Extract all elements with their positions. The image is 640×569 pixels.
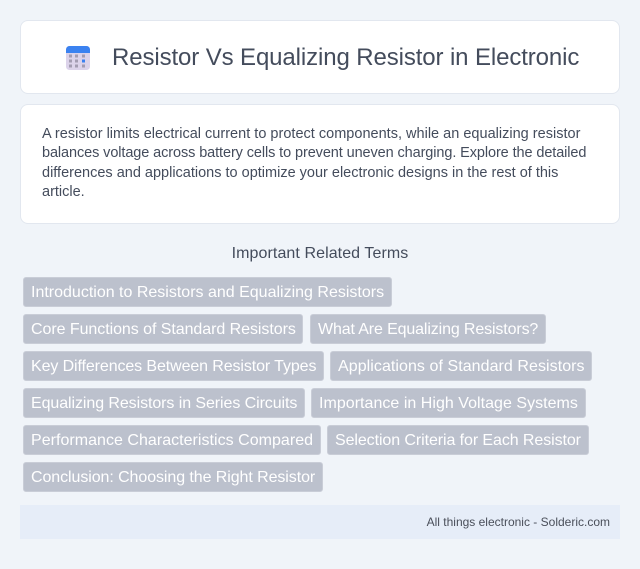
text block: intro paragraph: article.	[42, 184, 85, 200]
chip: Importance in High Voltage Systems	[319, 395, 578, 412]
chip: Conclusion: Choosing the Right Resistor	[31, 469, 315, 486]
text block: intro paragraph: A resistor limits electrical current to protect components, while an equalizing resistor	[42, 126, 580, 142]
text block: intro paragraph: differences and applications to optimize your electronic designs in the rest of this	[42, 165, 558, 181]
chip: Core Functions of Standard Resistors	[31, 321, 296, 338]
icon: calendar grid	[66, 46, 90, 70]
panel: title header	[20, 20, 620, 94]
footer text: All things electronic - Solderic.com	[427, 515, 610, 529]
text block: intro paragraph: balances voltage across battery cells to prevent uneven charging. Explore the detailed	[42, 145, 586, 161]
panel: term chips	[23, 277, 592, 492]
chip: Applications of Standard Resistors	[338, 358, 585, 375]
chip	[23, 314, 303, 344]
panel: intro text	[20, 104, 620, 224]
chip	[310, 314, 546, 344]
heading: related terms: Important Related Terms	[232, 245, 408, 262]
chip: What Are Equalizing Resistors?	[318, 321, 538, 338]
text block: intro paragraph	[42, 126, 586, 200]
chip	[311, 388, 586, 418]
chip	[327, 425, 589, 455]
chip: Performance Characteristics Compared	[31, 432, 313, 449]
chip	[330, 351, 592, 381]
chip	[23, 388, 305, 418]
chip: Equalizing Resistors in Series Circuits	[31, 395, 297, 412]
chip	[23, 462, 323, 492]
chip: Key Differences Between Resistor Types	[31, 358, 316, 375]
chip	[23, 425, 321, 455]
chip: Selection Criteria for Each Resistor	[335, 432, 581, 449]
title: Resistor Vs Equalizing Resistor in Electronic	[112, 44, 579, 71]
chip	[23, 277, 392, 307]
footer bar	[20, 505, 620, 539]
chip	[23, 351, 324, 381]
chip: Introduction to Resistors and Equalizing Resistors	[31, 284, 384, 301]
